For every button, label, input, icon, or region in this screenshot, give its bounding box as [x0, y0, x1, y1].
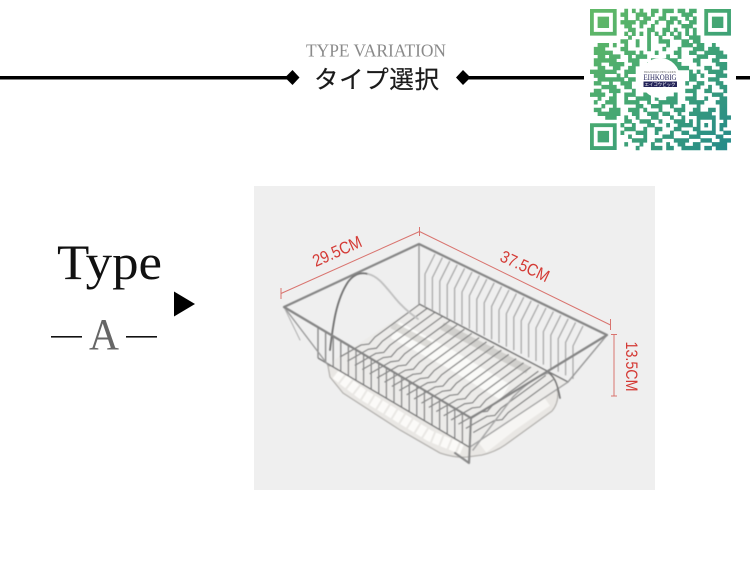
- dimension: height 13.5CM: 13.5CM: [622, 342, 641, 392]
- left handle: [330, 273, 418, 350]
- front wire rack: [318, 327, 469, 447]
- icon: right arrow: [174, 292, 195, 316]
- heading: TYPE VARIATION: TYPE VARIATION: [306, 40, 446, 60]
- dimension: height 13.5CM: [611, 334, 641, 396]
- panel: product photo: [254, 186, 655, 490]
- QR logo badge: BRAND KITCHEN GOODS: [644, 70, 676, 74]
- heading: type selection: タイプ選択: [314, 66, 439, 94]
- rim and frame: [284, 244, 607, 463]
- right handle: [473, 373, 560, 450]
- header divider right: [456, 70, 750, 85]
- QR logo badge: [640, 58, 680, 98]
- dimension: length 37.5CM: 37.5CM: [497, 247, 552, 286]
- dimension: length 37.5CM: [420, 227, 610, 330]
- label: A with side rules: A: [89, 310, 119, 359]
- rack floor: [328, 304, 568, 447]
- QR logo badge: EIHKOBIG: [644, 73, 677, 82]
- drip tray: [328, 360, 558, 457]
- back wire rack: [425, 254, 583, 379]
- QR code: [584, 3, 736, 155]
- dimension: width 29.5CM: 29.5CM: [310, 232, 365, 271]
- header divider left: [0, 70, 300, 85]
- label: A with side rules: [51, 310, 157, 359]
- QR logo badge: エイコウビック: [644, 81, 676, 88]
- dish rack basket: [284, 244, 607, 463]
- label: Type: Type: [57, 234, 162, 290]
- dimension: width 29.5CM: [281, 232, 420, 299]
